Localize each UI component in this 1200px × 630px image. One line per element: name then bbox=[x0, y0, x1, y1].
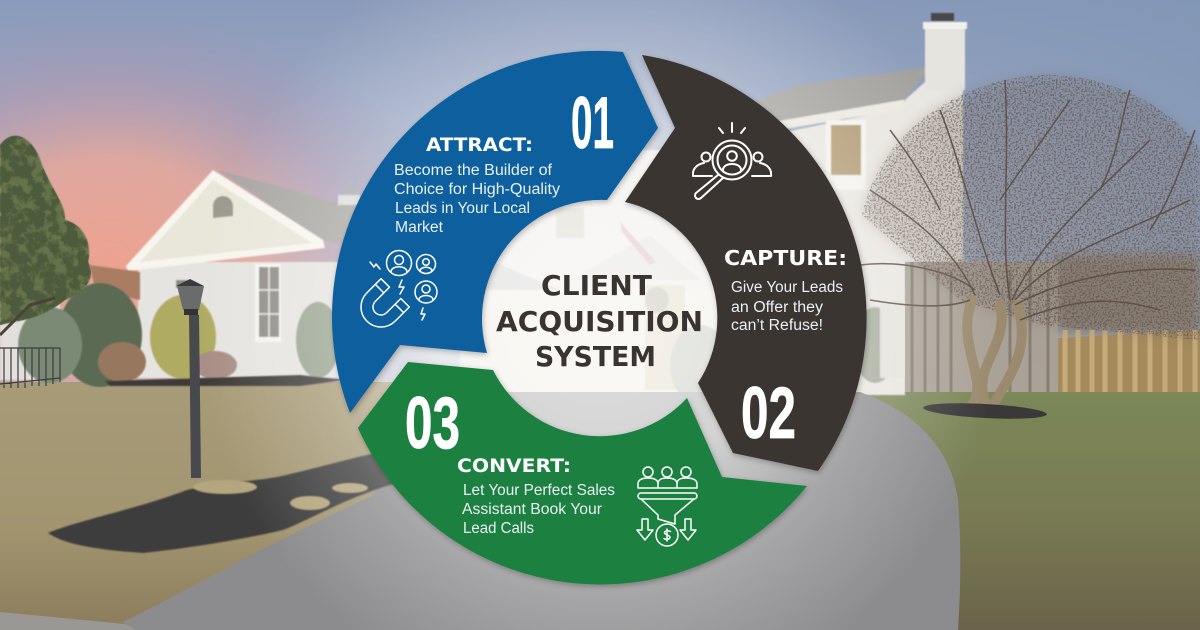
number 02: 02 bbox=[741, 373, 796, 454]
lawn right bbox=[860, 392, 1200, 630]
text: capture description: an Offer they bbox=[731, 299, 823, 316]
sky bbox=[0, 0, 1200, 420]
text: capture description bbox=[731, 279, 843, 334]
bare tree bbox=[860, 75, 1200, 421]
text: attract description: Market bbox=[395, 219, 444, 236]
iron fence bbox=[0, 348, 60, 388]
text: capture description: Give Your Leads bbox=[731, 279, 843, 296]
text: attract description bbox=[394, 162, 560, 236]
text: convert description: Assistant Book Your bbox=[462, 501, 602, 518]
text: attract description: Choice for High-Quality bbox=[394, 181, 560, 198]
brown roof and shrubs left bbox=[0, 265, 345, 387]
text: attract description: Leads in Your Local bbox=[395, 200, 530, 217]
text: convert description: Let Your Perfect Sales bbox=[463, 482, 615, 499]
segment 02: capture (dark brown) bbox=[625, 55, 867, 471]
main house centre bbox=[460, 13, 967, 405]
icon: magnifier over people bbox=[693, 123, 771, 199]
text: attract description: Become the Builder of bbox=[394, 162, 553, 179]
text: convert description: Lead Calls bbox=[463, 520, 534, 537]
text: convert description bbox=[462, 482, 615, 537]
heading: capture: CAPTURE: bbox=[724, 246, 847, 270]
centre title: ACQUISITION bbox=[496, 306, 703, 338]
centre title: CLIENT bbox=[541, 270, 652, 302]
text: capture description: can’t Refuse! bbox=[731, 317, 823, 334]
left white building bbox=[126, 170, 362, 378]
segment 03: convert (green) bbox=[358, 362, 807, 584]
centre title bbox=[496, 270, 703, 373]
driveway bbox=[123, 392, 960, 630]
background shrubs right bbox=[1055, 255, 1200, 335]
heading: attract: ATTRACT: bbox=[426, 135, 533, 156]
sidewalk corner bbox=[0, 612, 145, 630]
number 01: 01 bbox=[571, 83, 614, 164]
cycle ring bbox=[332, 51, 867, 584]
evergreen tree left bbox=[0, 130, 95, 335]
lamp post bbox=[176, 279, 204, 478]
heading: convert: CONVERT: bbox=[457, 456, 571, 477]
icon: sales funnel bbox=[637, 467, 697, 546]
segment 01: attract (blue) bbox=[332, 51, 658, 413]
ornamental grass bbox=[193, 480, 368, 510]
centre title: SYSTEM bbox=[535, 341, 656, 373]
mulch bed bbox=[48, 445, 410, 553]
wood fence bbox=[905, 262, 1200, 392]
icon: magnet attracting people bbox=[353, 250, 437, 335]
number 03: 03 bbox=[405, 383, 460, 464]
lawn left bbox=[0, 382, 560, 630]
